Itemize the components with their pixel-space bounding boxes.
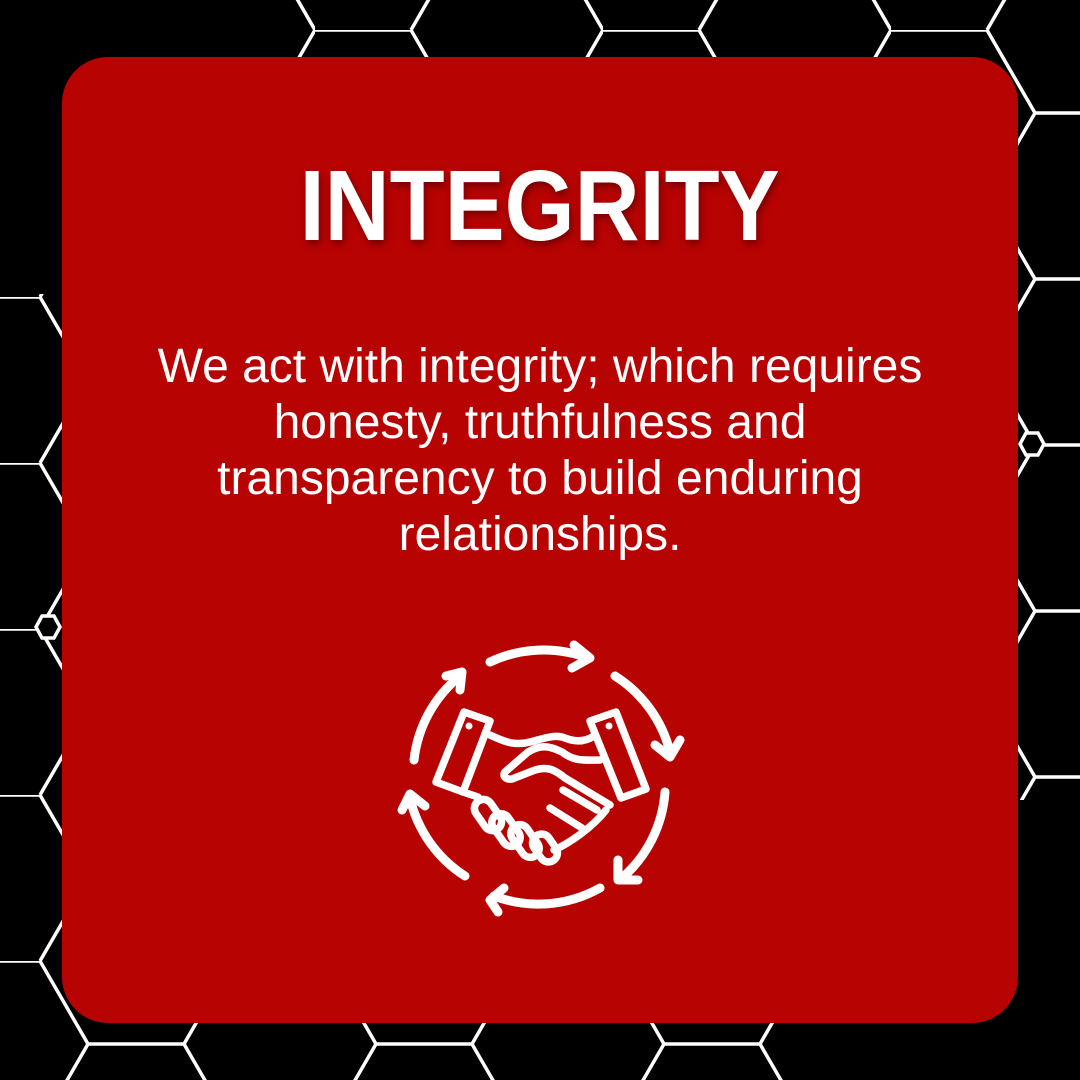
handshake [436, 712, 646, 865]
circular arrows [402, 645, 680, 912]
body text: transparency to build enduring [217, 452, 863, 505]
body text: We act with integrity; which requires [158, 340, 922, 393]
background honeycomb top-right [296, 0, 1080, 800]
title: INTEGRITY [300, 150, 780, 262]
panel: red card [62, 57, 1018, 1023]
body text: honesty, truthfulness and [274, 396, 806, 449]
small hexagon right [1020, 433, 1044, 455]
body text: relationships. [399, 508, 681, 561]
background honeycomb bottom-left [0, 294, 783, 1080]
small hexagon left [36, 616, 60, 638]
body text [158, 340, 922, 561]
